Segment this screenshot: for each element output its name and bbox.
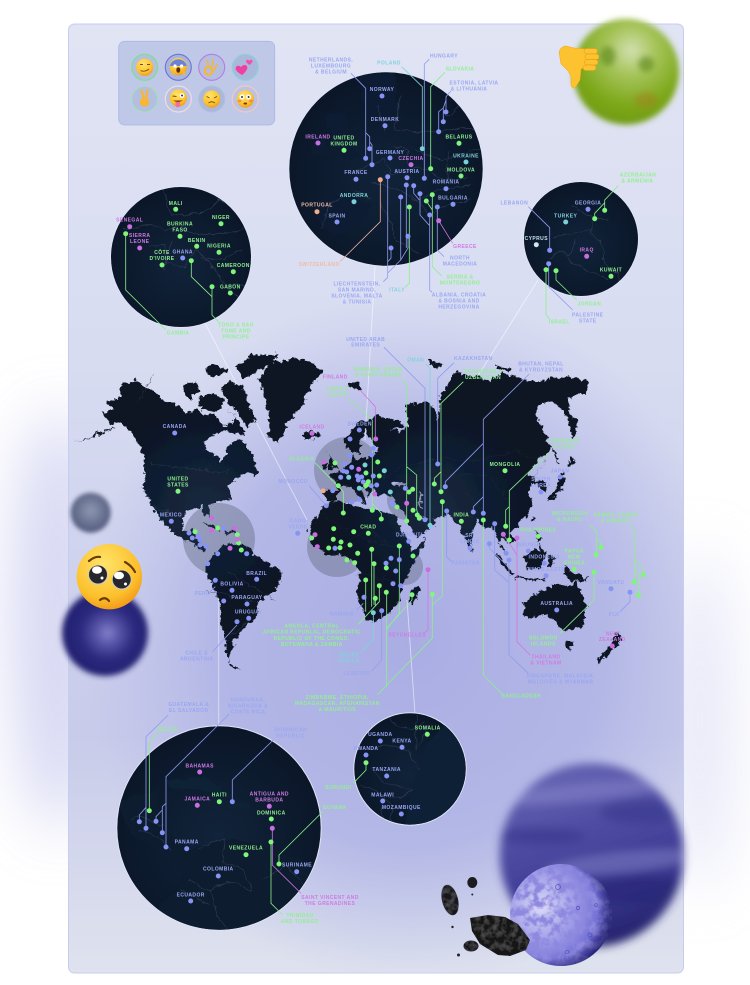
labels: Europe: NETHERLANDS, bbox=[309, 58, 353, 64]
emoji: winking tongue face bbox=[165, 86, 191, 112]
map: Americas and Greenland bbox=[74, 353, 323, 668]
emoji: pleading face bbox=[77, 544, 142, 609]
labels: Africa bbox=[263, 525, 426, 713]
labels: Middle East: GEORGIA bbox=[575, 200, 601, 206]
emoji: two hearts bbox=[232, 54, 258, 80]
labels: Oceania: SAMOA, TONGA bbox=[594, 513, 638, 519]
labels: Americas: UNITED bbox=[167, 477, 189, 483]
labels: Caribbean: HAITI bbox=[212, 793, 227, 799]
labels: Oceania: NEW bbox=[568, 555, 581, 561]
labels: Asia: OMAN bbox=[407, 358, 424, 364]
labels: Middle East: STATE bbox=[579, 318, 597, 324]
labels: Oceania: FIJI bbox=[609, 612, 619, 618]
labels: West Africa: D'IVOIRE bbox=[149, 256, 175, 262]
labels: Middle East: TURKEY bbox=[554, 213, 577, 219]
labels: Europe: ITALY bbox=[389, 287, 405, 293]
labels: Oceania bbox=[529, 511, 638, 648]
labels: Caribbean: BAHAMAS bbox=[185, 763, 214, 769]
labels: West Africa: GHANA bbox=[172, 249, 193, 255]
inset: Middle East bbox=[500, 173, 656, 325]
labels: Africa: LESOTHO bbox=[343, 671, 371, 677]
labels: Asia: MONGOLIA bbox=[490, 462, 520, 468]
labels: Africa: MADAGASCAR, AFGHANISTAN bbox=[295, 701, 380, 707]
emoji legend panel bbox=[119, 41, 275, 125]
dot: peach bbox=[321, 488, 326, 493]
leader lines: Europe bbox=[340, 59, 453, 292]
labels: Europe: SAN MARINO, bbox=[338, 287, 376, 293]
labels: Caribbean: COLOMBIA bbox=[203, 867, 234, 873]
leader lines: West Africa bbox=[126, 234, 218, 330]
labels: Asia: KAZAKHSTAN bbox=[454, 356, 493, 362]
labels: Caribbean: DOMINICAN bbox=[274, 728, 307, 734]
labels: West Africa: GABON bbox=[220, 284, 241, 290]
labels: Europe: MACEDONIA bbox=[443, 262, 477, 268]
labels: Europe and North Africa: ICELAND bbox=[299, 424, 325, 430]
emoji: OK hand bbox=[199, 54, 225, 80]
labels: Asia: PAKISTAN bbox=[452, 561, 480, 567]
inset: Central America and Caribbean bbox=[117, 697, 359, 935]
labels: West Africa: GAMBIA bbox=[167, 330, 189, 336]
main panel bbox=[68, 24, 684, 973]
map highlight circles bbox=[183, 437, 427, 585]
labels: Europe: IRELAND bbox=[305, 135, 331, 141]
world map bbox=[74, 353, 620, 668]
labels: Africa: SEYCHELLES bbox=[389, 633, 426, 639]
labels: Asia bbox=[407, 356, 595, 700]
labels: East Africa: UGANDA bbox=[368, 732, 393, 738]
labels: West Africa: BURKINA bbox=[167, 221, 193, 227]
labels: Asia: INDIA bbox=[453, 513, 469, 519]
labels: Asia: KOREA bbox=[531, 483, 551, 489]
labels: Europe bbox=[298, 54, 498, 310]
labels: Europe and North Africa: EMIRATES bbox=[351, 343, 380, 349]
labels: Caribbean: THE GRENADINES bbox=[305, 901, 356, 907]
labels: Africa: ZIMBABWE, ETHIOPIA, bbox=[306, 695, 369, 701]
map dots bbox=[171, 430, 643, 646]
labels: Oceania: VANUATU bbox=[598, 580, 624, 586]
labels: Asia: & LAOS bbox=[554, 445, 575, 451]
labels: Europe: UNITED bbox=[333, 136, 355, 142]
labels: Asia: SRI bbox=[465, 533, 475, 539]
labels: Caribbean bbox=[158, 697, 359, 925]
labels: Middle East: KUWAIT bbox=[600, 268, 622, 274]
leader lines: teal bbox=[361, 364, 430, 652]
labels: Europe: ROMANIA bbox=[433, 180, 459, 186]
labels: East Africa: SOMALIA bbox=[415, 725, 441, 731]
map labels bbox=[160, 337, 638, 713]
labels: Middle East: CYPRUS bbox=[525, 236, 548, 242]
labels: Caribbean: COSTA RICA bbox=[231, 709, 265, 715]
labels: Caribbean: GUYANA bbox=[323, 805, 347, 811]
labels: Americas: PERU bbox=[195, 591, 210, 597]
labels: Caribbean: TRINIDAD bbox=[286, 913, 314, 919]
labels: Caribbean: BARBUDA bbox=[255, 798, 283, 804]
inset: West Africa bbox=[110, 186, 254, 340]
labels: Caribbean: BURUNDI bbox=[325, 785, 351, 791]
labels: East Africa: KENYA bbox=[392, 739, 412, 745]
labels: Americas: CANADA bbox=[163, 424, 187, 430]
labels: Europe: GERMANY bbox=[376, 150, 404, 156]
dots: purple bbox=[212, 433, 612, 646]
dots: West Africa bbox=[126, 209, 233, 293]
labels: Asia: JAPAN bbox=[551, 468, 569, 474]
labels: Americas: ARGENTINA bbox=[180, 656, 213, 662]
labels: Asia: TIMOR-LESTE bbox=[527, 567, 565, 573]
labels: Americas: CHILE & bbox=[185, 650, 208, 656]
map: Americas borders bbox=[136, 373, 275, 640]
leader lines: Caribbean bbox=[139, 714, 323, 915]
labels: Middle East: & ARMENIA bbox=[621, 178, 653, 184]
leader lines: Middle East bbox=[528, 186, 618, 319]
labels: Europe: MOLDOVA bbox=[447, 167, 475, 173]
labels: West Africa bbox=[116, 201, 254, 340]
labels: West Africa: SENEGAL bbox=[116, 218, 143, 224]
emoji: disappointed face bbox=[199, 86, 225, 112]
labels: Africa: BOTSWANA & ZAMBIA bbox=[281, 642, 343, 648]
inset: Europe bbox=[289, 54, 498, 310]
inset map: West Africa borders bbox=[122, 189, 250, 300]
labels: Africa: & MAURITIUS bbox=[319, 707, 356, 713]
dots: blue bbox=[171, 430, 630, 622]
leader line: Burundi bbox=[353, 763, 366, 783]
labels: West Africa: SIERRA bbox=[129, 233, 150, 239]
labels: Oceania: PAPUA bbox=[565, 549, 584, 555]
labels: Europe and North Africa: MOROCCO bbox=[278, 479, 308, 485]
labels: Africa: NAMIBIA bbox=[330, 611, 354, 617]
labels: Middle East: LEBANON bbox=[500, 200, 528, 206]
labels: Oceania: ZEALAND bbox=[599, 637, 626, 643]
labels: Asia: PHILIPPINES bbox=[520, 528, 556, 534]
labels: Europe and North Africa: ALGERIA bbox=[289, 456, 314, 462]
labels: Europe and North Africa: BAHRAIN, QATAR bbox=[354, 367, 403, 373]
labels: Europe and North Africa: FINLAND bbox=[323, 374, 348, 380]
map: Eurasia, Africa and Oceania bbox=[304, 358, 620, 663]
labels: Europe: & LITHUANIA bbox=[451, 86, 487, 92]
labels: Europe: BULGARIA bbox=[438, 196, 468, 202]
inset: East Africa bbox=[353, 713, 470, 825]
labels: Oceania: GUINEA bbox=[563, 561, 585, 567]
labels: Asia: CAMBODIA bbox=[549, 439, 580, 445]
labels: Europe: ESTONIA, LATVIA bbox=[450, 80, 498, 86]
labels: Oceania: & KIRIBATI bbox=[601, 519, 631, 525]
labels: Europe and North Africa: & SAUDI ARABIA bbox=[355, 373, 402, 379]
labels: East Africa bbox=[354, 725, 441, 811]
labels: Asia: BHUTAN, NEPAL bbox=[518, 362, 564, 368]
labels: Africa: CHAD bbox=[360, 525, 376, 531]
labels: Middle East bbox=[500, 173, 656, 325]
labels: Asia: SINGAPORE, MALAYSIA, bbox=[527, 674, 595, 680]
labels: Europe and North Africa bbox=[278, 337, 403, 530]
labels: West Africa: MALI bbox=[169, 201, 183, 207]
labels: Europe: LIECHTENSTEIN, bbox=[334, 281, 381, 287]
labels: Europe: UKRAINE bbox=[453, 153, 479, 159]
labels: West Africa: CÔTE bbox=[154, 248, 170, 256]
labels: Europe and North Africa: UNITED ARAB bbox=[346, 337, 385, 343]
labels: Caribbean: REPUBLIC bbox=[276, 734, 305, 740]
labels: West Africa: BENIN bbox=[188, 238, 206, 244]
labels: Europe: ALBANIA, CROATIA bbox=[432, 292, 486, 298]
labels: Oceania: AUSTRALIA bbox=[540, 601, 573, 607]
labels: Oceania: MICRONESIA bbox=[552, 511, 588, 517]
labels: Europe: PORTUGAL bbox=[301, 203, 333, 209]
labels: Oceania: & NAURU bbox=[557, 517, 583, 523]
map leader lines bbox=[210, 347, 643, 695]
labels: Oceania: SOLOMON bbox=[529, 636, 558, 642]
dots: green bbox=[178, 462, 643, 598]
dots: Caribbean bbox=[139, 772, 297, 901]
labels: West Africa: NIGER bbox=[212, 215, 230, 221]
labels: Asia: MALDIVES & MYANMAR bbox=[528, 679, 593, 685]
labels: Europe: ANDORRA bbox=[340, 193, 368, 199]
labels: Europe: SERBIA & bbox=[446, 274, 474, 280]
labels: Europe and North Africa: EGYPT bbox=[328, 392, 347, 398]
labels: Americas bbox=[160, 424, 267, 662]
labels: Middle East: PALESTINE bbox=[572, 312, 604, 318]
labels: Europe: FRANCE bbox=[344, 170, 368, 176]
labels: West Africa: CAMEROON bbox=[217, 263, 250, 269]
labels: Europe: DENMARK bbox=[371, 117, 399, 123]
labels: Africa: SOUTH bbox=[339, 653, 359, 659]
labels: Asia: SOUTH bbox=[531, 477, 551, 483]
labels: Caribbean: EL SALVADOR bbox=[169, 708, 209, 714]
labels: Middle East: ISRAEL bbox=[549, 319, 570, 325]
labels: Africa: REPUBLIC OF THE CONGO, bbox=[274, 636, 350, 642]
labels: Americas: BRAZIL bbox=[246, 571, 267, 577]
labels: Asia: BRUNEI bbox=[517, 543, 539, 549]
labels: West Africa: PRINCIPE bbox=[223, 334, 250, 340]
labels: Caribbean: GUATEMALA & bbox=[168, 702, 209, 708]
labels: East Africa: RWANDA bbox=[354, 746, 378, 752]
labels: Europe: BELARUS bbox=[445, 134, 473, 140]
labels: Caribbean: SURINAME bbox=[282, 863, 312, 869]
labels: Americas: URUGUAY bbox=[235, 609, 263, 615]
labels: Europe: CZECHIA bbox=[398, 156, 424, 162]
labels: Europe and North Africa: LIBYA & bbox=[327, 386, 349, 392]
labels: Europe: NORWAY bbox=[370, 87, 394, 93]
labels: Americas: STATES bbox=[167, 482, 189, 488]
emoji: screaming face bbox=[165, 54, 191, 80]
emoji: victory hand bbox=[132, 86, 158, 112]
labels: Asia: THAILAND bbox=[532, 655, 560, 661]
labels: Europe: SWITZERLAND bbox=[298, 262, 340, 268]
labels: Caribbean: BELIZE bbox=[158, 727, 178, 733]
dots: teal bbox=[349, 465, 430, 613]
labels: Africa: AFRICAN REPUBLIC, DEMOCRATIC bbox=[263, 630, 360, 636]
labels: Europe: HUNGARY bbox=[430, 54, 458, 60]
labels: Europe: & TUNISIA bbox=[343, 299, 371, 305]
emoji: flushed face bbox=[232, 86, 258, 112]
labels: Asia: INDONESIA bbox=[529, 554, 560, 560]
emoji: smirking face bbox=[132, 54, 158, 80]
inset map: Middle East borders bbox=[549, 205, 618, 285]
labels: East Africa: MALAWI bbox=[371, 792, 394, 798]
labels: Americas: BOLIVIA bbox=[220, 581, 244, 587]
labels: Africa: ANGOLA, CENTRAL bbox=[284, 624, 339, 630]
labels: Middle East: AZERBAIJAN bbox=[620, 173, 656, 179]
labels: West Africa: TOGO & SAO bbox=[218, 322, 254, 328]
labels: Africa: DJIBOUTI bbox=[396, 533, 423, 539]
labels: West Africa: LEONE bbox=[130, 239, 150, 245]
dots: Europe bbox=[317, 96, 466, 248]
labels: Europe: MONTENEGRO bbox=[440, 280, 480, 286]
labels: Caribbean: ANTIGUA AND bbox=[250, 792, 289, 798]
labels: East Africa: TANZANIA bbox=[372, 767, 401, 773]
labels: Caribbean: SAINT VINCENT AND bbox=[301, 895, 359, 901]
labels: Middle East: IRAQ bbox=[580, 247, 594, 253]
labels: Asia: & KYRGYZSTAN bbox=[519, 367, 563, 373]
labels: Middle East: JORDAN bbox=[577, 301, 601, 307]
labels: Asia: & VIETNAM bbox=[530, 660, 562, 666]
labels: Europe: & BELGIUM bbox=[315, 70, 347, 76]
labels: Europe: GREECE bbox=[453, 244, 477, 250]
labels: Asia: UZBEKISTAN bbox=[465, 375, 501, 381]
dots: East Africa bbox=[366, 734, 427, 814]
dots: Middle East bbox=[536, 209, 611, 276]
labels: Caribbean: AND TOBAGO bbox=[281, 919, 319, 925]
labels: West Africa: FASO bbox=[172, 227, 188, 233]
inset map: Caribbean landforms bbox=[119, 799, 314, 930]
leader lines: green bbox=[315, 379, 643, 695]
labels: Europe: & BOSNIA AND bbox=[438, 298, 480, 304]
labels: Oceania: NEW bbox=[606, 631, 619, 637]
labels: Europe: LUXEMBOURG bbox=[311, 64, 351, 70]
labels: Europe: SLOVAKIA bbox=[446, 66, 474, 72]
labels: Caribbean: DOMINICA bbox=[257, 810, 286, 816]
labels: Europe: NORTH bbox=[450, 256, 470, 262]
leader lines: purple bbox=[360, 390, 530, 655]
labels: Europe: SPAIN bbox=[328, 213, 346, 219]
planet: blurred grey bbox=[71, 493, 111, 533]
labels: Europe and North Africa: SWEDEN bbox=[347, 421, 372, 427]
connector lines between insets and map bbox=[205, 267, 538, 727]
background glow bbox=[10, 410, 730, 890]
planet: large blurred violet bbox=[495, 763, 706, 947]
labels: Asia: TAJIKISTAN & bbox=[464, 369, 502, 375]
labels: Europe: HERZEGOVINA bbox=[438, 304, 480, 310]
asteroids bbox=[438, 877, 530, 956]
labels: Europe and North Africa: CABO bbox=[290, 518, 306, 524]
labels: Oceania: ISLANDS bbox=[531, 642, 556, 648]
moon bbox=[510, 864, 612, 966]
leader lines: blue bbox=[210, 347, 630, 673]
labels: Americas: MEXICO bbox=[160, 512, 182, 518]
labels: Africa: AFRICA bbox=[338, 659, 359, 665]
labels: Europe: POLAND bbox=[377, 60, 401, 66]
labels: Asia: BANGLADESH bbox=[501, 694, 541, 700]
labels: West Africa: NIGERIA bbox=[207, 243, 231, 249]
planet: blurred navy bbox=[62, 590, 148, 676]
labels: Europe: AUSTRIA bbox=[394, 169, 420, 175]
planet: blurred green bbox=[573, 19, 679, 125]
labels: Europe and North Africa: VERDE bbox=[288, 524, 308, 530]
labels: Caribbean: ECUADOR bbox=[177, 892, 205, 898]
labels: Americas: PARAGUAY bbox=[231, 595, 263, 601]
labels: Caribbean: NICARAGUA & bbox=[228, 703, 268, 709]
labels: Caribbean: JAMAICA bbox=[184, 797, 210, 803]
inset map: East Africa borders bbox=[360, 715, 470, 825]
labels: Europe: SLOVENIA, MALTA bbox=[331, 293, 383, 299]
inset map: Europe landforms bbox=[312, 72, 480, 255]
labels: Asia: LANKA bbox=[460, 539, 480, 545]
emoji: thumbs down bbox=[559, 46, 599, 88]
labels: Caribbean: HONDURAS, bbox=[231, 697, 265, 703]
labels: East Africa: MOZAMBIQUE bbox=[382, 805, 421, 811]
labels: Caribbean: VENEZUELA bbox=[229, 846, 263, 852]
labels: Caribbean: PANAMA bbox=[175, 840, 199, 846]
labels: West Africa: TOME AND bbox=[221, 328, 251, 334]
labels: Europe: KINGDOM bbox=[330, 142, 358, 148]
